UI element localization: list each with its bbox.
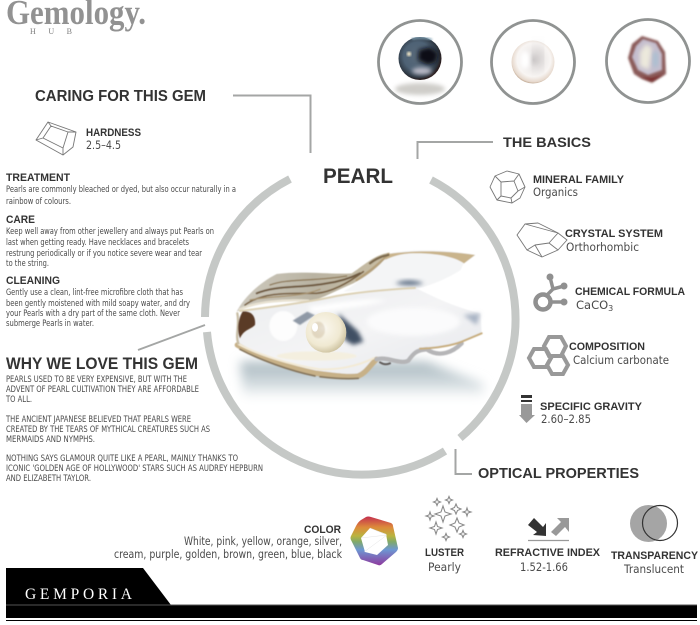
property: luster: Pearly [428, 560, 461, 574]
hardness block: HARDNESS [86, 127, 141, 139]
hardness block [36, 122, 141, 155]
shell rim [237, 288, 482, 379]
property: mineral family: Organics [533, 185, 578, 199]
property: color [114, 516, 398, 565]
property: transparency [611, 505, 699, 576]
property: refractive index: REFRACTIVE INDEX [495, 547, 601, 559]
property: specific gravity: SPECIFIC GRAVITY [540, 401, 643, 413]
property: mineral family: MINERAL FAMILY [533, 174, 625, 186]
text block: why we love this gem: AND ELIZABETH TAYLOR. [6, 473, 91, 483]
left upper shell lobe [237, 253, 390, 312]
text block: why we love this gem: THE ANCIENT JAPANESE BELIEVED THAT PEARLS WERE [5, 414, 191, 424]
icon: molecule [536, 274, 568, 310]
right upper shell lobe [343, 250, 476, 292]
text block: care: restrung periodically or if you notice severe wear and tear [6, 248, 202, 258]
property: specific gravity: 2.60–2.85 [541, 412, 591, 426]
text block: why we love this gem [5, 374, 263, 483]
heading: the basics: THE BASICS [503, 134, 591, 150]
text block: care: Keep well away from other jewellery and always put Pearls on [6, 226, 214, 236]
connector: why we love to circle [138, 325, 205, 350]
text block: treatment [6, 172, 236, 206]
text block: cleaning: submerge Pearls in water. [6, 318, 94, 328]
property: color: White, pink, yellow, orange, silver, [184, 534, 342, 548]
property: specific gravity [519, 395, 643, 426]
text block: why we love this gem: TO ALL. [5, 394, 32, 404]
heading: optical properties: OPTICAL PROPERTIES [478, 465, 639, 482]
text block: why we love this gem: PEARLS USED TO BE VERY EXPENSIVE, BUT WITH THE [6, 374, 187, 384]
icon: refraction arrows [528, 518, 569, 540]
text block: cleaning: CLEANING [6, 275, 60, 287]
connector: caring to title [233, 96, 310, 153]
property: refractive index: 1.52-1.66 [520, 560, 568, 574]
icon: down arrow [519, 395, 535, 423]
lower shell [236, 288, 482, 378]
icon: sparkles [426, 496, 471, 540]
title: pearl: PEARL [323, 165, 393, 188]
property: transparency: Translucent [623, 562, 684, 576]
property: refractive index [495, 518, 601, 574]
property: composition: Calcium carbonate [573, 353, 669, 367]
icon: rainbow ring [350, 516, 398, 565]
circle frame [205, 179, 516, 475]
connector: optical [456, 449, 472, 474]
text block: cleaning: your Pearls with a dry part of the same cloth. Never [6, 308, 180, 318]
property: composition: COMPOSITION [569, 341, 645, 353]
hinge [238, 312, 255, 338]
property: composition [529, 337, 669, 374]
heading: caring for this gem: CARING FOR THIS GEM [35, 88, 206, 105]
text block: why we love this gem: MERMAIDS AND NYMPHS. [6, 434, 95, 444]
property: crystal system: CRYSTAL SYSTEM [565, 228, 663, 240]
heading: why we love this gem: WHY WE LOVE THIS GEM [6, 354, 198, 373]
text block: care [6, 214, 214, 268]
hardness block: 2.5–4.5 [86, 138, 121, 152]
icon: dodecahedron [490, 171, 525, 203]
pearl [306, 312, 346, 353]
property: mineral family [490, 171, 625, 203]
text block: treatment: TREATMENT [6, 172, 70, 184]
text block: care: to the string. [6, 258, 49, 268]
property: chemical formula: 3 [608, 304, 613, 313]
text block: cleaning: Gently use a clean, lint-free microfibre cloth that has [6, 287, 183, 297]
property: transparency: TRANSPARENCY [611, 550, 699, 562]
property: chemical formula [536, 274, 685, 313]
icon: hexagons [529, 337, 568, 374]
text block: why we love this gem: ADVENT OF PEARL CULTIVATION THEY ARE AFFORDABLE [6, 384, 199, 394]
icon: hardness crystal [36, 122, 76, 155]
property: luster [425, 496, 471, 574]
text block: cleaning [6, 275, 190, 328]
icon: overlapping circles [630, 505, 678, 542]
oyster body [236, 250, 482, 379]
property: luster: LUSTER [425, 547, 464, 559]
logo: Gemology Hub: H U B [30, 27, 72, 36]
property: crystal system: Orthorhombic [566, 240, 639, 254]
property: chemical formula: CaCO [576, 298, 608, 312]
property: color: cream, purple, golden, brown, green, blue, black [114, 547, 342, 561]
text block: treatment: rainbow of colours. [6, 196, 71, 206]
text block: why we love this gem: ICONIC 'GOLDEN AGE OF HOLLYWOOD' STARS SUCH AS AUDREY HEPBURN [6, 463, 263, 473]
text block: care: CARE [6, 214, 35, 226]
text block: treatment: Pearls are commonly bleached or dyed, but also occur naturally in a [6, 184, 236, 194]
property: color: COLOR [304, 524, 341, 536]
oyster shadow [240, 362, 483, 398]
property: crystal system [517, 223, 663, 257]
text block: cleaning: been gently moistened with mild soapy water, and dry [6, 298, 190, 308]
gem photo: black pearl [378, 20, 462, 104]
text block: care: last when getting ready. Have necklaces and bracelets [6, 237, 189, 247]
text block: why we love this gem: CREATED BY THE TEARS OF MYTHICAL CREATURES SUCH AS [6, 424, 210, 434]
footer banner [6, 568, 697, 620]
brand: gemporia: GEMPORIA [25, 586, 133, 603]
shell interior shading [269, 300, 480, 361]
gem photo: baroque pearl [606, 20, 690, 102]
icon: crystal [517, 223, 567, 257]
oyster with pearl photo [236, 250, 483, 398]
gem photo: white pearl [492, 20, 574, 104]
connector: basics to title [418, 142, 493, 159]
text block: why we love this gem: NOTHING SAYS GLAMOUR QUITE LIKE A PEARL, MAINLY THANKS TO [6, 453, 238, 463]
property: chemical formula: CHEMICAL FORMULA [575, 286, 685, 298]
